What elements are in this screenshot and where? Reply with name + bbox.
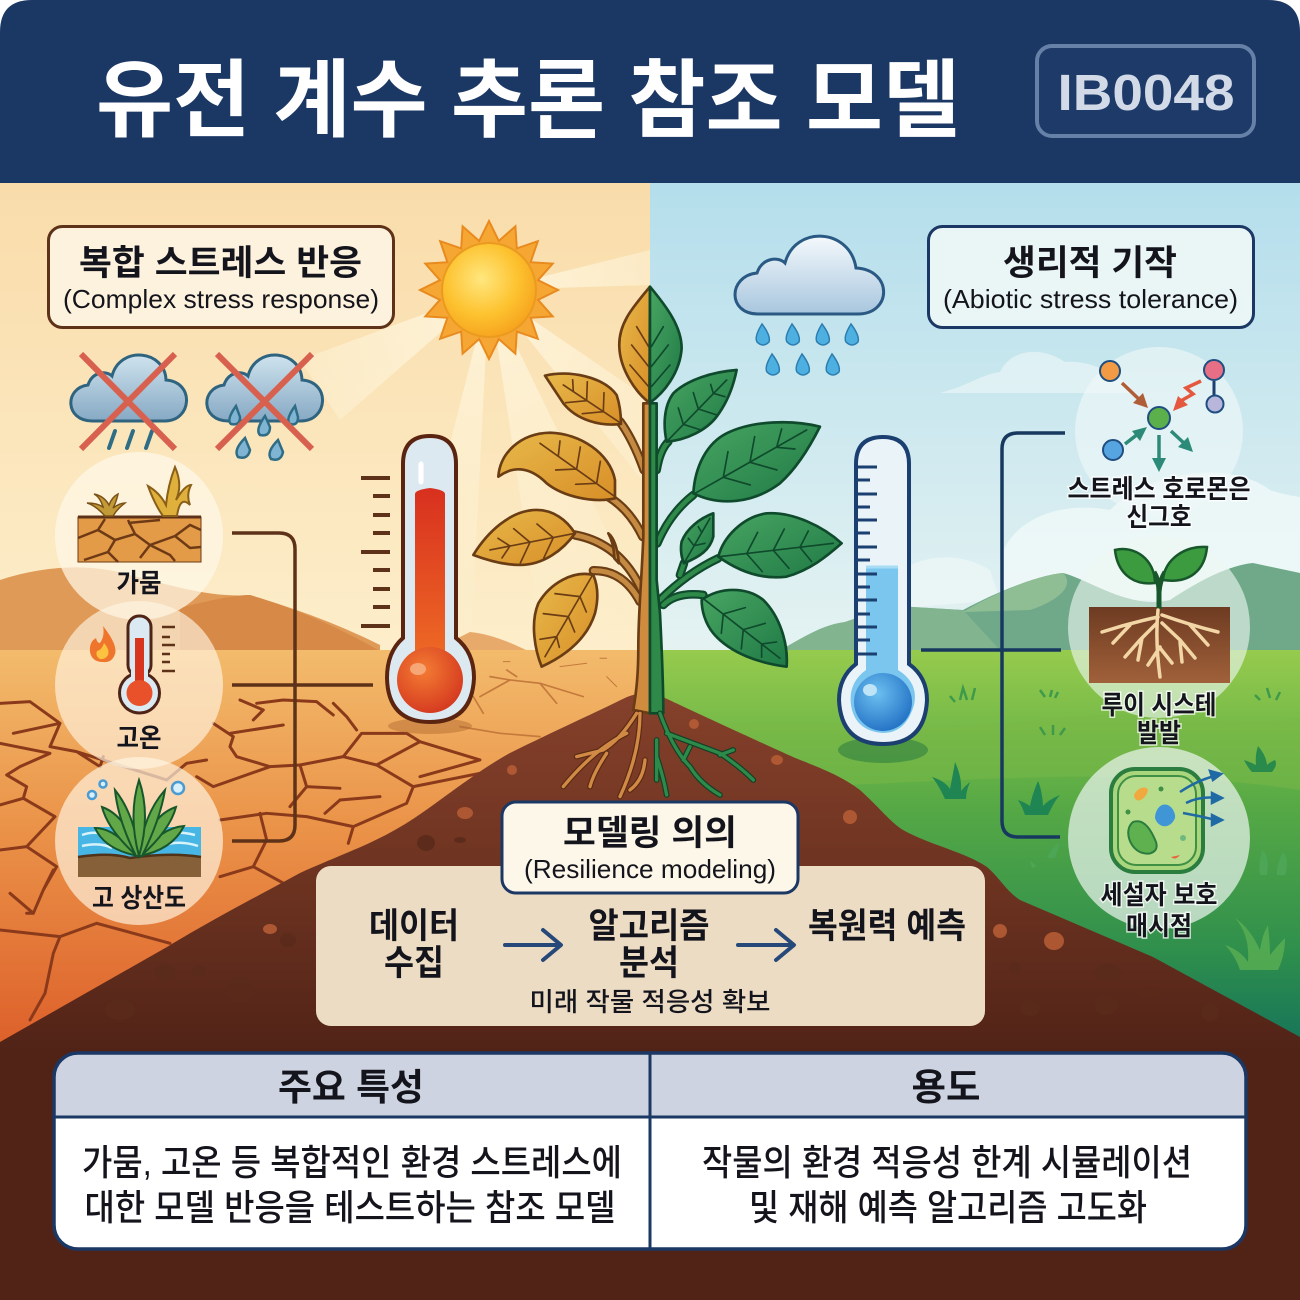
icon: sun — [420, 221, 558, 359]
panel: cell protection — [1068, 747, 1250, 941]
panel: high salinity: 고 상산도 — [92, 883, 186, 913]
title: 유전 계수 추론 참조 모델 — [96, 54, 960, 149]
column: uses: 작물의 환경 적응성 한계 시뮬레이션 — [702, 1142, 1192, 1183]
header band — [0, 0, 1300, 183]
panel: left heading — [48, 226, 394, 328]
panel: root system development — [1068, 536, 1250, 748]
heading: modelling significance: 모델링 의의 — [563, 814, 737, 853]
caption: securing crop adaptability: 미래 작물 적응성 확보 — [530, 987, 770, 1017]
background: arid left side — [0, 183, 650, 1050]
ground mound — [0, 694, 1300, 1050]
column: key properties: 가뭄, 고온 등 복합적인 환경 스트레스에 — [82, 1142, 622, 1183]
soil pebbles — [263, 719, 1064, 950]
badge: IB0048: IB0048 — [1058, 64, 1234, 121]
panel: modelling significance — [316, 866, 985, 1026]
withered left half — [473, 287, 650, 713]
arrow: algorithm to prediction — [738, 930, 794, 960]
icon: salt tolerant plant — [95, 780, 184, 856]
icon: flame — [90, 626, 116, 662]
flow step: algorithm analysis: 알고리즘 — [588, 907, 710, 946]
icon: plant cell — [1111, 769, 1203, 872]
heading: modelling significance: (Resilience modeling) — [524, 854, 776, 884]
panel: left heading: 복합 스트레스 반응 — [79, 244, 362, 283]
background: lush right side — [650, 183, 1300, 1050]
flow step: data collection: 수집 — [384, 944, 444, 983]
roots — [563, 713, 645, 797]
flow step: algorithm analysis — [588, 907, 710, 983]
icon: crossed out cloud 1 — [71, 354, 187, 449]
healthy right half — [650, 287, 842, 713]
icon: water and soil — [78, 827, 201, 877]
icon: small thermometer — [120, 616, 175, 713]
heading: modelling significance — [502, 802, 798, 893]
column: uses — [702, 1067, 1192, 1228]
panel: root system development: 발발 — [1137, 718, 1181, 748]
icon: seedling and roots — [1089, 547, 1230, 683]
icon: half withered half healthy plant — [473, 287, 842, 797]
table: properties and uses — [54, 1053, 1246, 1249]
icon: cracked earth — [78, 467, 201, 562]
panel: right heading — [928, 226, 1254, 328]
arrow: data to algorithm — [505, 930, 561, 960]
grass tufts — [932, 688, 1287, 970]
panel: stress hormone signalling — [1068, 347, 1250, 532]
flow step: data collection — [369, 907, 459, 983]
flow step: data collection: 데이터 — [369, 907, 459, 946]
panel: left heading: (Complex stress response) — [63, 284, 379, 314]
column: key properties: 대한 모델 반응을 테스트하는 참조 모델 — [84, 1187, 616, 1228]
icon: crossed out cloud 2 — [207, 354, 323, 460]
panel: stress hormone signalling: 신그호 — [1126, 502, 1192, 532]
column: uses: 용도 — [912, 1067, 980, 1108]
panel: cell protection: 세설자 보호 — [1100, 880, 1218, 910]
panel: drought: 가뭄 — [116, 568, 162, 598]
panel: cell protection: 매시점 — [1126, 911, 1192, 941]
soil lower band — [0, 1050, 1300, 1300]
panel: high temperature — [55, 601, 223, 769]
flow step: algorithm analysis: 분석 — [619, 944, 679, 983]
icon: rain cloud — [735, 236, 884, 375]
panel: high temperature: 고온 — [116, 723, 162, 753]
right connector lines — [921, 433, 1065, 837]
left connector lines — [232, 533, 373, 841]
column: key properties: 주요 특성 — [278, 1067, 424, 1108]
panel: root system development: 루이 시스테 — [1102, 690, 1216, 720]
panel: stress hormone signalling: 스트레스 호로몬은 — [1068, 474, 1250, 504]
icon: large red thermometer — [361, 436, 474, 734]
icon: outgoing arrows — [1180, 771, 1222, 825]
panel: right heading: 생리적 기작 — [1003, 244, 1177, 283]
icon: signalling network — [1100, 360, 1224, 472]
panel: drought — [55, 452, 223, 620]
icon: large blue thermometer — [838, 437, 928, 763]
flow step: resilience prediction: 복원력 예측 — [808, 907, 966, 946]
column: key properties — [82, 1067, 622, 1228]
ground cracks — [0, 700, 480, 1020]
panel: right heading: (Abiotic stress tolerance) — [943, 284, 1238, 314]
panel: high salinity — [55, 757, 223, 925]
badge: IB0048 — [1037, 46, 1254, 136]
column: uses: 및 재해 예측 알고리즘 고도화 — [749, 1187, 1147, 1228]
